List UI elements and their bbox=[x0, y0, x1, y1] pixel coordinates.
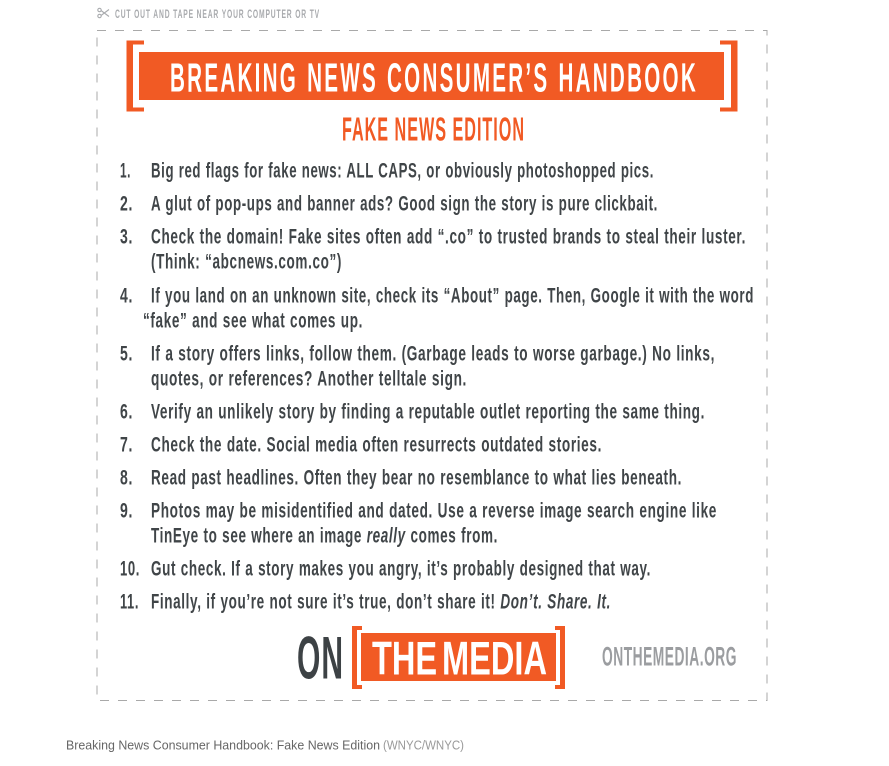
tip 8: 8. bbox=[120, 466, 133, 490]
panel: dashed coupon border bbox=[97, 30, 767, 700]
tip 7 bbox=[120, 432, 602, 456]
header banner bbox=[126, 40, 738, 112]
tip 11: 11. bbox=[120, 590, 139, 614]
tip 5: 5. bbox=[120, 342, 133, 366]
tip list bbox=[120, 158, 754, 614]
tip 4 bbox=[120, 284, 754, 332]
website url: ONTHEMEDIA.ORG bbox=[602, 642, 737, 672]
logo left bracket bbox=[352, 626, 362, 689]
tip 6: 6. bbox=[120, 400, 133, 424]
tip 9 bbox=[120, 498, 717, 548]
tip 3: (Think: “abcnews.com.co”) bbox=[151, 250, 342, 274]
tip 2: 2. bbox=[120, 192, 133, 216]
logo: On the Media bbox=[297, 624, 565, 692]
tip 9: TinEye to see where an image really comes from. bbox=[151, 524, 498, 548]
logo words THE MEDIA: THE MEDIA bbox=[372, 632, 547, 684]
caption: Breaking News Consumer Handbook: Fake News Edition bbox=[66, 738, 380, 752]
tip 10: 10. bbox=[120, 556, 140, 580]
logo right bracket bbox=[555, 626, 565, 689]
tip 3 bbox=[120, 224, 746, 274]
tip 11: Finally, if you’re not sure it’s true, don’t share it! Don’t. Share. It. bbox=[151, 590, 611, 614]
left bracket bbox=[126, 40, 144, 112]
tip 8 bbox=[120, 466, 682, 490]
logo word ON: ON bbox=[297, 624, 344, 692]
tip 4: “fake” and see what comes up. bbox=[143, 308, 363, 332]
cut-out instruction: CUT OUT AND TAPE NEAR YOUR COMPUTER OR TV bbox=[115, 7, 320, 21]
tip 10 bbox=[120, 556, 651, 580]
tip 5 bbox=[120, 342, 715, 390]
tip 7: Check the date. Social media often resurrects outdated stories. bbox=[151, 432, 602, 456]
infographic: FAKE NEWS EDITION bbox=[342, 110, 525, 148]
icon: scissors bbox=[98, 8, 109, 18]
tip 1 bbox=[120, 158, 654, 182]
banner bar bbox=[139, 52, 724, 100]
tip 5: quotes, or references? Another telltale sign. bbox=[151, 366, 467, 390]
logo orange bar bbox=[361, 633, 556, 681]
right bracket bbox=[720, 40, 738, 112]
tip 9: 9. bbox=[120, 498, 133, 522]
caption: (WNYC/WNYC) bbox=[383, 738, 464, 752]
tip 3: 3. bbox=[120, 224, 133, 248]
tip 1: 1. bbox=[120, 158, 131, 182]
tip 7: 7. bbox=[120, 432, 133, 456]
tip 4: 4. bbox=[120, 284, 133, 308]
tip 2 bbox=[120, 192, 658, 216]
